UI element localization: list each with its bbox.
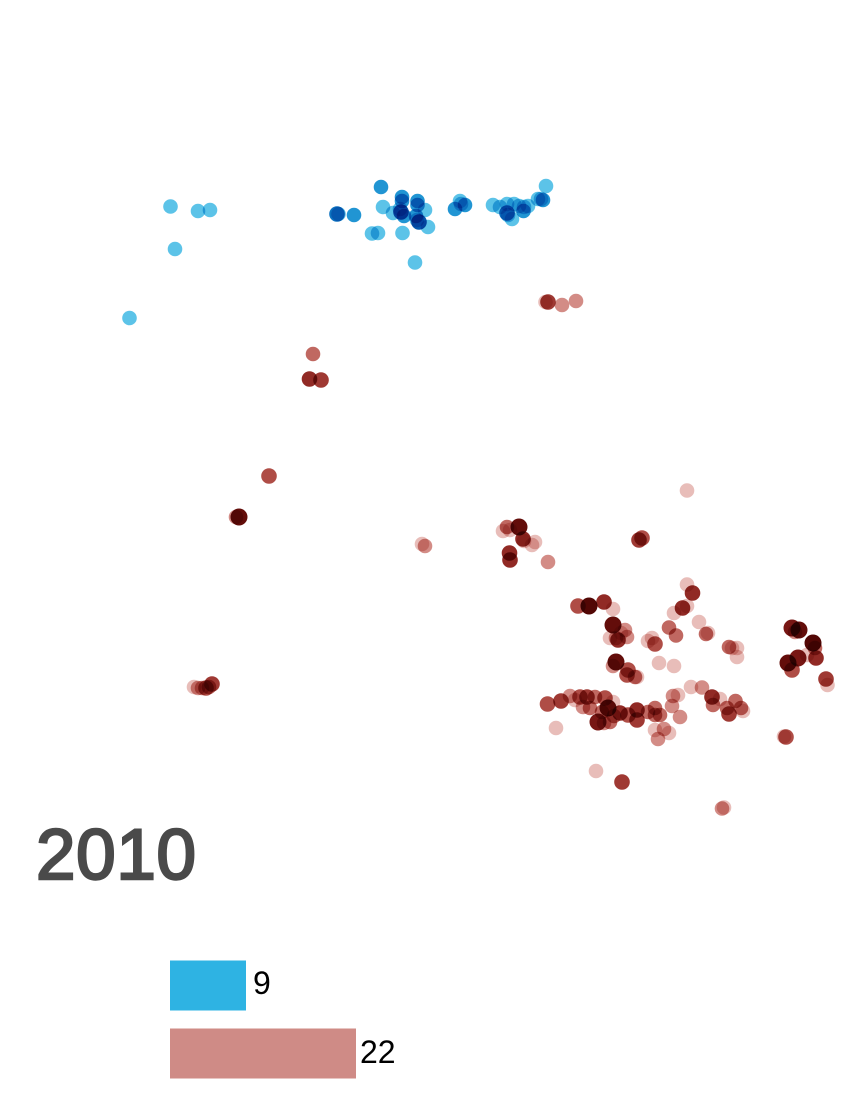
red dots: lower south-east band [540,680,794,816]
red dots: central cluster [496,483,694,569]
legend: blue value: 9 [253,965,271,1001]
year title: 2010 [36,816,197,895]
blue dots: east cluster [448,179,553,226]
legend: red value: 22 [360,1034,396,1070]
red dots: upper south-east cluster [570,577,744,684]
blue dots: central cluster [329,180,435,270]
legend: blue bar [170,960,246,1010]
red dots: northern scatter [187,294,583,696]
red dots: far-east cluster [780,620,835,692]
legend: red bar [170,1028,356,1078]
blue dots: isolated west [122,199,217,325]
